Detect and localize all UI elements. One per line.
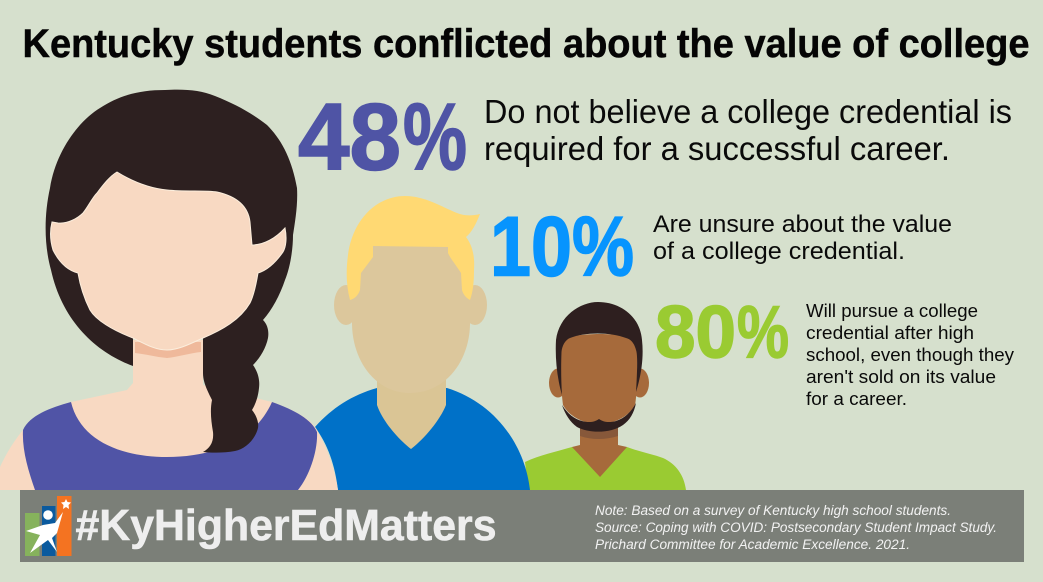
stat: 80 percent: [655, 290, 1015, 409]
stat: 10 percent: 10: [490, 200, 572, 294]
stat text: 80 percent description: Will pursue a college: [806, 300, 978, 321]
stat: 48 percent: 48: [298, 84, 401, 190]
stat text: 48 percent description: Do not believe a college credential is: [484, 93, 1012, 130]
illustration: young man in green shirt: [525, 302, 686, 490]
stat: 48 percent: %: [403, 84, 467, 190]
stat: 80 percent: %: [737, 290, 789, 374]
stat text: 80 percent description: [806, 300, 1015, 409]
stat text: 10 percent description: of a college credential.: [653, 238, 905, 265]
footer band: [20, 490, 1024, 562]
source note: [595, 503, 997, 552]
stat text: 80 percent description: credential after high: [806, 322, 974, 343]
hashtag: #KyHigherEdMatters: [76, 501, 496, 550]
stat text: 80 percent description: for a career.: [806, 388, 907, 409]
stat: 48 percent: [298, 84, 1012, 190]
source note: Source: Coping with COVID: Postsecondary Student Impact Study.: [595, 520, 997, 535]
stat: 10 percent: [490, 200, 952, 294]
stat: 80 percent: 80: [655, 290, 736, 374]
stat text: 48 percent description: [484, 93, 1012, 167]
stat text: 10 percent description: [653, 211, 952, 265]
illustration: woman with braid in purple top: [0, 90, 338, 490]
source note: Note: Based on a survey of Kentucky high school students.: [595, 503, 951, 518]
stat: 10 percent: %: [572, 200, 634, 294]
stat text: 48 percent description: required for a successful career.: [484, 130, 950, 167]
source note: Prichard Committee for Academic Excellence. 2021.: [595, 537, 910, 552]
illustration: man in blue shirt: [315, 196, 530, 490]
icon: logo with bars and star figure: [25, 496, 72, 556]
stat text: 80 percent description: school, even though they: [806, 344, 1015, 365]
stat text: 10 percent description: Are unsure about the value: [653, 211, 952, 238]
stat text: 80 percent description: aren't sold on its value: [806, 366, 996, 387]
